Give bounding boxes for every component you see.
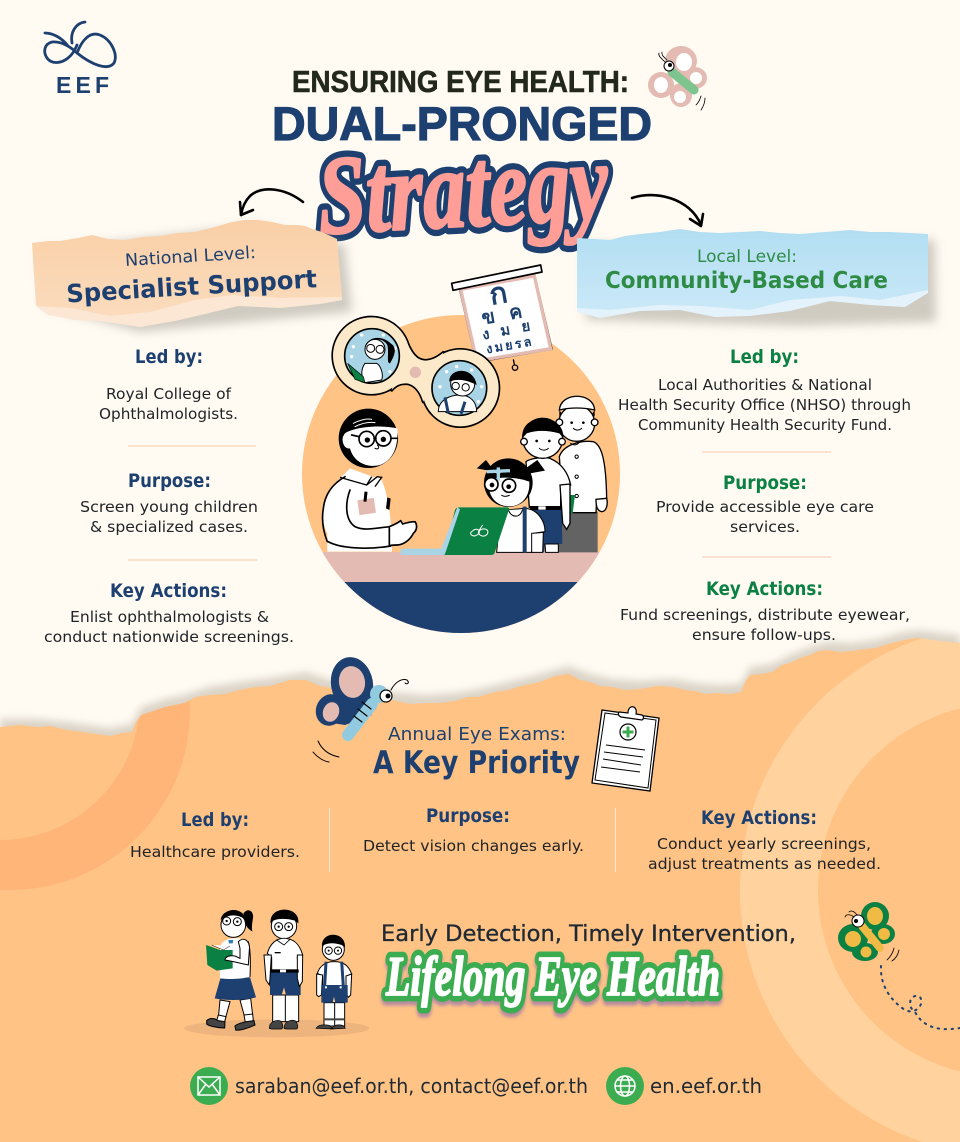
icon: eye chart: ย <box>520 317 532 336</box>
heading: annual eye exams: A Key Priority <box>373 745 580 781</box>
arrow: to local level <box>632 195 703 226</box>
logo: EEF: EEF <box>56 72 109 98</box>
text: key actions national: Enlist ophthalmologists & <box>70 608 269 626</box>
panel: local level banner <box>577 229 936 326</box>
title: DUAL-PRONGED <box>272 97 652 150</box>
icon: green butterfly <box>838 902 899 961</box>
text: led by national <box>99 385 238 423</box>
heading: led by: Led by: <box>135 346 203 368</box>
text: led by national: Ophthalmologists. <box>99 405 238 423</box>
text: purpose national <box>80 498 258 536</box>
panel: local level banner: Local Level: <box>697 247 797 267</box>
text: purpose local: Provide accessible eye care <box>656 498 874 516</box>
text: key actions local: Fund screenings, distribute eyewear, <box>620 606 910 624</box>
text: key actions local: ensure follow-ups. <box>692 626 836 644</box>
figure: boy <box>521 418 575 552</box>
icon: spectacles with portraits <box>333 317 499 426</box>
figure: girl at laptop <box>477 458 545 552</box>
figure: man in white cap <box>556 396 607 552</box>
text: led by local: Health Security Office (NHSO) through <box>618 396 911 414</box>
contact: website: en.eef.or.th <box>650 1074 762 1098</box>
illustration: three students <box>184 910 369 1037</box>
tagline: lifelong eye health: Lifelong Eye Health <box>385 946 720 1008</box>
panel: national level details <box>44 346 294 646</box>
panel: national level banner: Specialist Support <box>65 264 318 309</box>
tagline: early detection: Early Detection, Timely Intervention, <box>381 922 796 947</box>
contact: email: saraban@eef.or.th, contact@eef.or.th <box>235 1074 588 1098</box>
text: purpose national: Screen young children <box>80 498 258 516</box>
heading: annual eye exams <box>373 724 580 781</box>
panel: annual exams purpose: Purpose: <box>426 805 510 827</box>
icon: clipboard <box>592 707 659 791</box>
text: led by local <box>618 376 911 434</box>
panel: annual exams key actions: Conduct yearly screenings, <box>657 835 871 853</box>
portrait: girl <box>348 338 395 383</box>
panel: local level details <box>618 346 911 644</box>
panel: annual exams key actions: adjust treatments as needed. <box>648 855 881 873</box>
text: purpose local: services. <box>730 518 800 536</box>
icon: eye chart: งมยรล <box>485 333 535 356</box>
illustration: eye screening <box>300 265 630 642</box>
tagline: lifelong eye health: Lifelong Eye Health <box>385 946 720 1008</box>
tagline: lifelong eye health <box>385 946 720 1012</box>
contact: website <box>606 1067 762 1105</box>
icon: eye chart: ก <box>487 275 510 312</box>
icon: pink butterfly <box>648 46 707 110</box>
heading: purpose: Purpose: <box>723 472 807 494</box>
tagline: lifelong eye health: Lifelong Eye Health <box>385 950 720 1012</box>
title: ENSURING EYE HEALTH: <box>292 64 629 99</box>
text: led by local: Community Health Security Fund. <box>638 416 892 434</box>
icon: eye chart: ง <box>481 326 491 344</box>
text: key actions national <box>44 608 294 646</box>
text: key actions local <box>620 606 910 644</box>
text: key actions national: conduct nationwide screenings. <box>44 628 294 646</box>
text: led by national: Royal College of <box>106 385 232 403</box>
torn paper orange lower section <box>0 627 960 1142</box>
icon: dotted flight trail <box>881 966 960 1029</box>
portrait: boy <box>438 371 477 414</box>
heading: led by: Led by: <box>730 346 799 368</box>
heading: annual eye exams: Annual Eye Exams: <box>388 724 566 745</box>
icon: navy butterfly <box>311 654 408 762</box>
figure: girl with book <box>206 910 256 1030</box>
text: purpose national: & specialized cases. <box>90 518 248 536</box>
panel: annual exams led by: Healthcare providers. <box>130 843 300 861</box>
contact: email <box>190 1067 588 1105</box>
panel: national level banner <box>32 220 352 332</box>
panel: local level banner: Community-Based Care <box>605 268 888 294</box>
panel: annual exams led by <box>130 809 300 861</box>
panel: annual exams key actions <box>648 807 881 873</box>
text: purpose local <box>656 498 874 536</box>
arrow: to national level <box>240 189 303 215</box>
panel: annual exams purpose: Detect vision changes early. <box>363 837 584 855</box>
panel: annual exams led by: Led by: <box>181 809 249 831</box>
icon: eye chart: ม <box>499 321 511 340</box>
panel: annual exams purpose <box>363 805 584 855</box>
heading: purpose: Purpose: <box>128 470 211 492</box>
panel: annual exams key actions: Key Actions: <box>701 807 817 829</box>
icon: eye chart: ค <box>507 299 524 324</box>
heading: key actions: Key Actions: <box>706 578 823 600</box>
figure: small boy with suspenders <box>316 935 352 1029</box>
logo: EEF <box>45 22 115 98</box>
title <box>272 64 652 259</box>
heading: key actions: Key Actions: <box>110 580 227 602</box>
figure: middle boy <box>264 910 303 1029</box>
icon: eye chart: ข <box>480 304 497 329</box>
title: Strategy <box>315 120 612 259</box>
icon: eye chart <box>452 265 552 370</box>
panel: national level banner: National Level: <box>124 243 256 271</box>
icon: laptop <box>400 507 509 555</box>
figure: doctor <box>323 409 417 552</box>
text: led by local: Local Authorities & National <box>658 376 872 394</box>
title: Strategy <box>315 120 612 259</box>
